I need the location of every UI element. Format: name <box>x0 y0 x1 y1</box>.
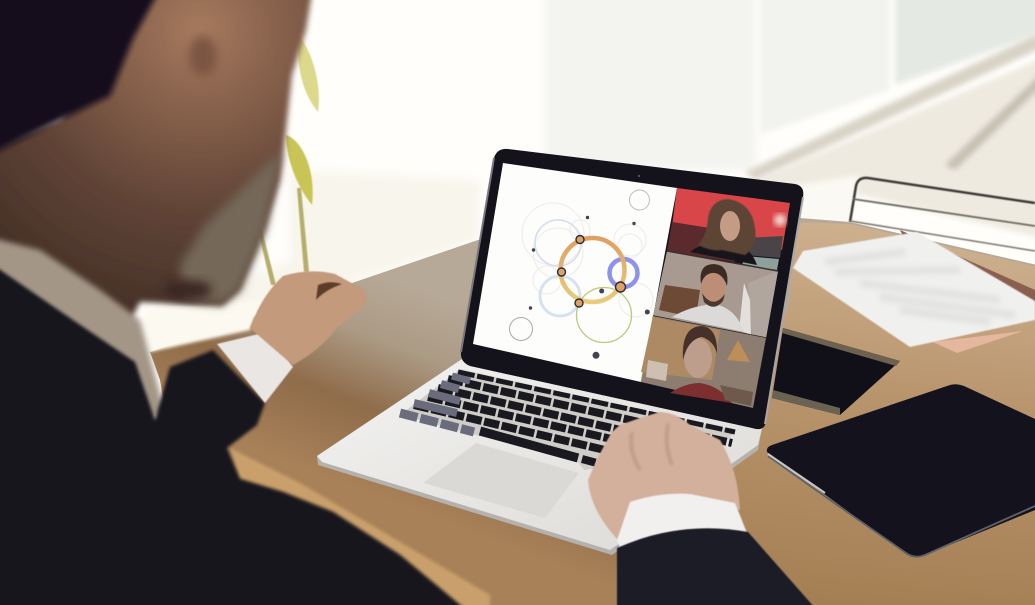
trackpad <box>423 443 579 518</box>
chair <box>850 178 1035 251</box>
tablet <box>767 384 1035 557</box>
man: hair <box>0 0 165 160</box>
laptop base <box>317 357 762 555</box>
laptop lid <box>461 149 803 429</box>
right hand, cuff and sleeve <box>588 412 830 605</box>
grey ring top right <box>630 190 650 210</box>
orange ring <box>560 238 624 302</box>
table <box>150 218 1035 605</box>
left hand and cuff <box>217 271 367 403</box>
light blue ring <box>540 276 580 316</box>
plant <box>259 35 319 285</box>
video pane: middle participant <box>653 251 778 338</box>
man: neck and head <box>0 0 314 340</box>
pale blue ring <box>535 220 581 266</box>
video pane: bottom participant <box>641 316 766 408</box>
connection nodes <box>558 236 626 307</box>
small dark dots <box>529 216 650 359</box>
window gap under chin <box>145 300 262 352</box>
faint grey circles <box>522 203 653 317</box>
man: shirt collar <box>0 235 165 420</box>
green-yellow ring <box>576 288 632 342</box>
man: suit and shoulders <box>0 256 484 605</box>
phone on table <box>772 328 900 415</box>
blue ring <box>610 259 638 287</box>
papers <box>793 230 1035 353</box>
screen: whiteboard app <box>473 163 677 382</box>
keyboard <box>400 369 736 470</box>
grey ring lower left <box>510 318 532 340</box>
video pane: top participant <box>667 188 790 270</box>
